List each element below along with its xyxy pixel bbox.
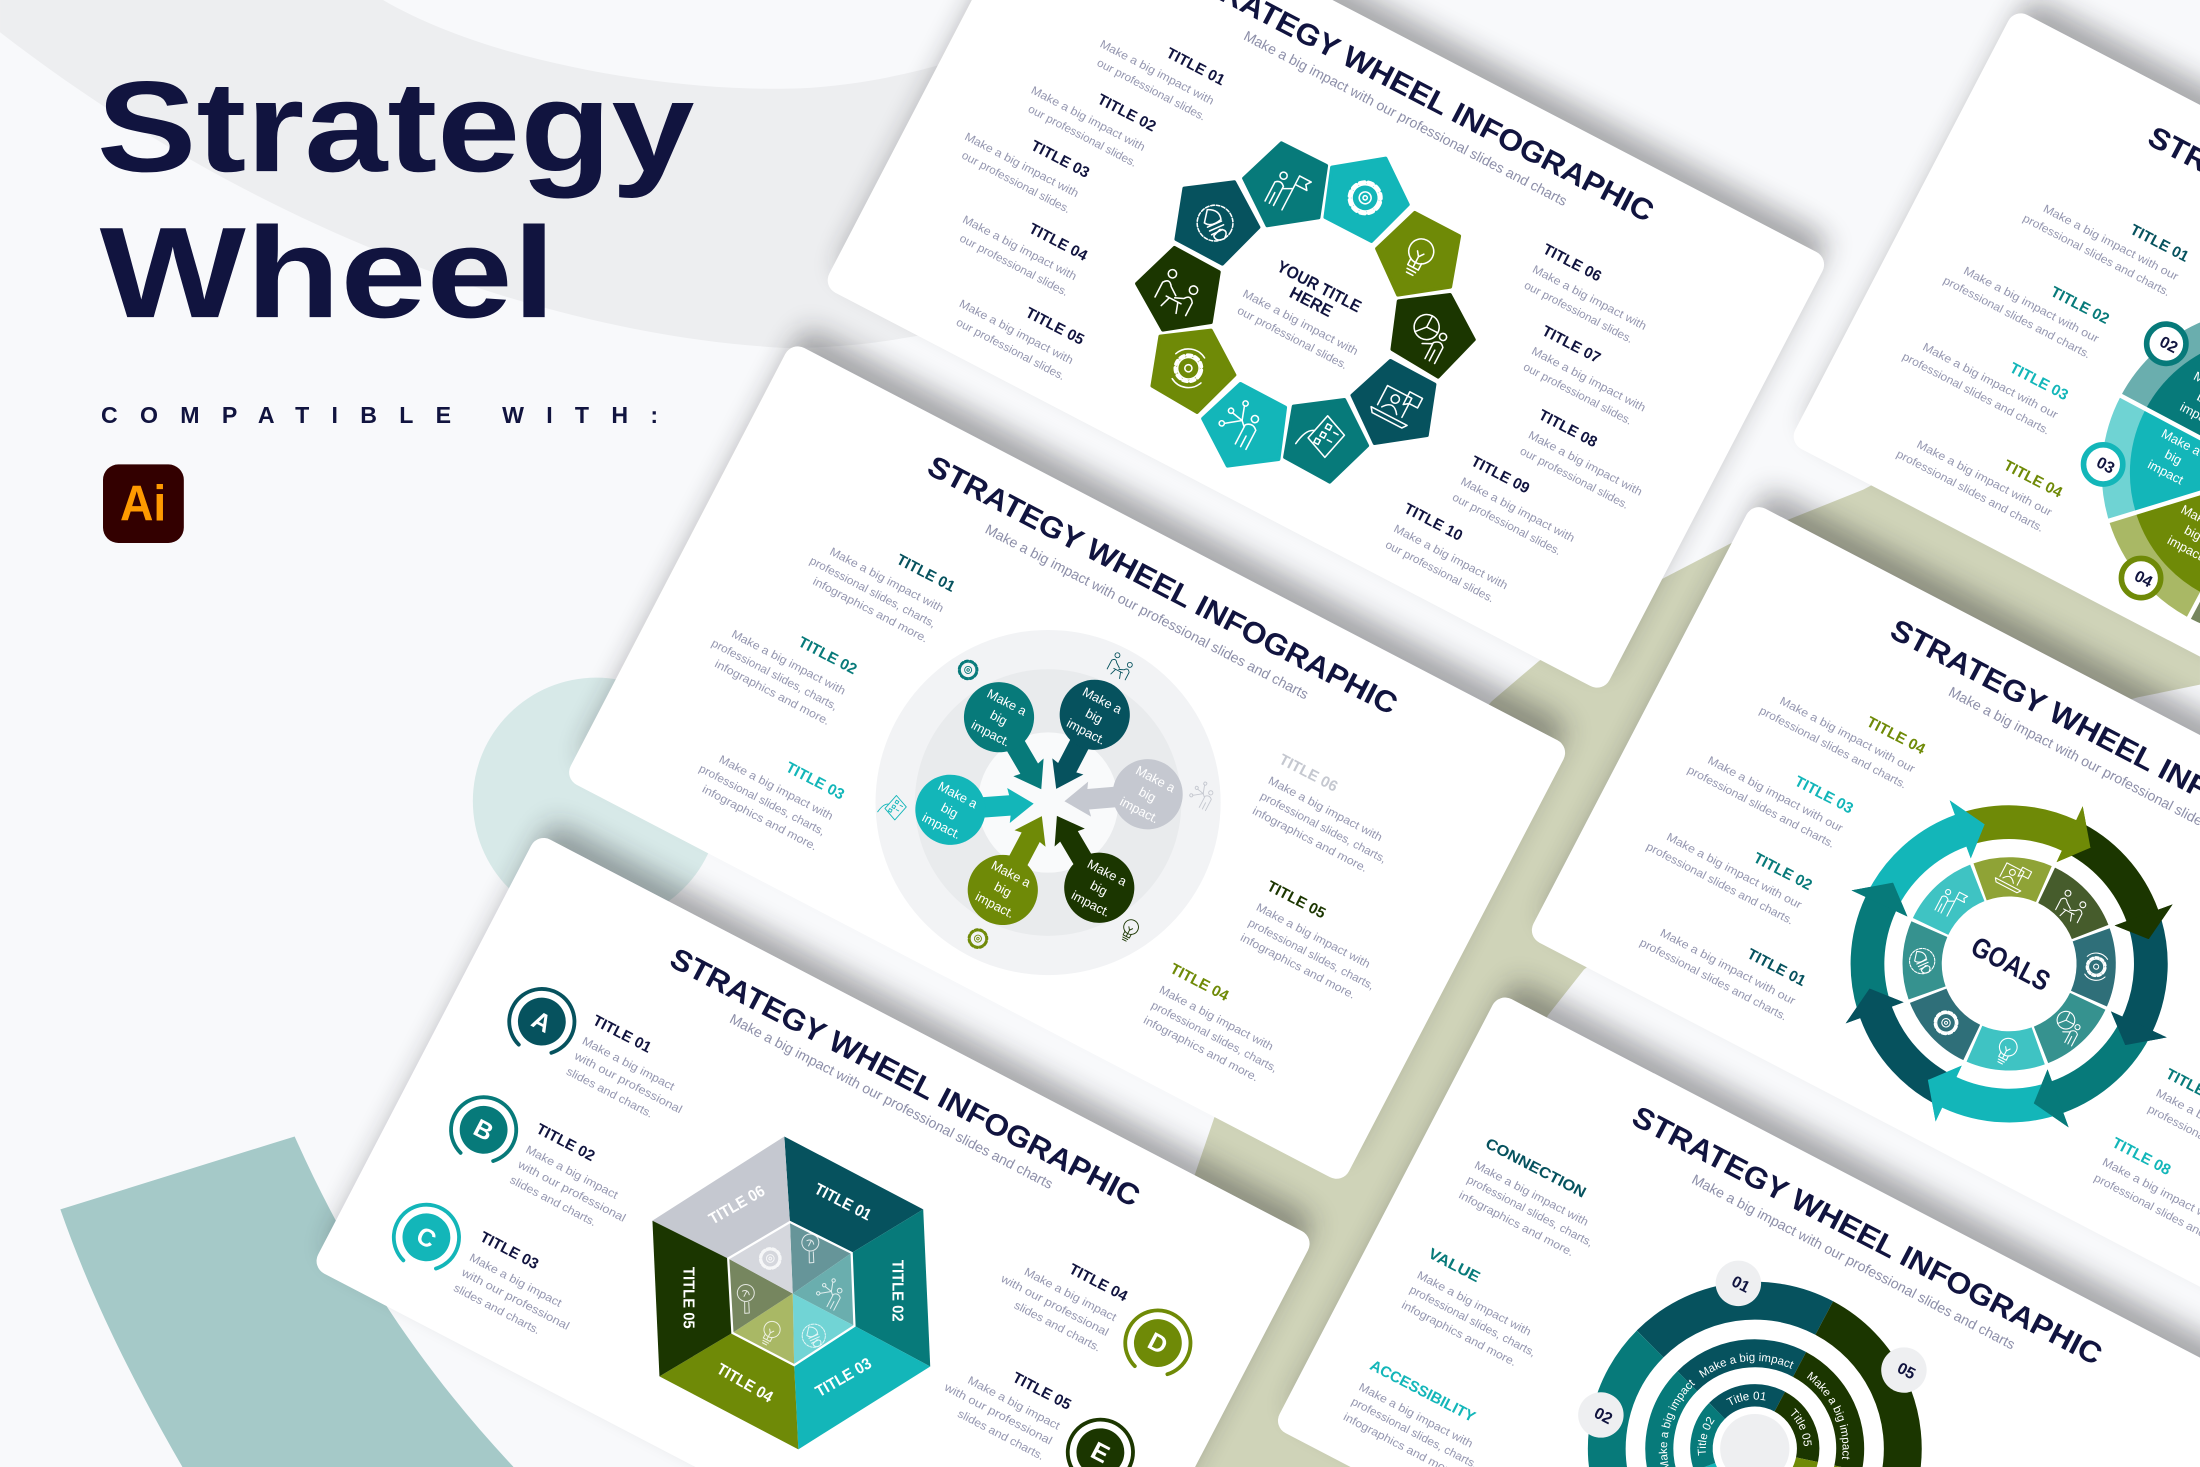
panel: slide with pentagon wheel: TITLE 03 xyxy=(1028,137,1092,182)
chart: six arrow pins: Make a xyxy=(989,857,1034,891)
chart: goals inner segments xyxy=(1901,856,2117,1072)
chart: hexagon wheel: TITLE 02 xyxy=(888,1260,906,1322)
curved labels: Title 02 xyxy=(1697,1416,1715,1456)
panel: slide with concentric rings: CONNECTION xyxy=(1483,1135,1589,1202)
chart: six arrow pins: big xyxy=(988,707,1010,728)
panel: slide with arrow pins: TITLE 05 xyxy=(1264,878,1329,923)
icon: Adobe Illustrator logo xyxy=(103,464,184,543)
panel: slide with pentagon wheel: TITLE 04 xyxy=(1026,220,1091,265)
panel: slide with pentagon wheel: our professional slides. xyxy=(1026,103,1138,170)
panel: slide with concentric rings: Make a big impact with xyxy=(1357,1381,1475,1451)
panel: slide with pentagon wheel: Make a big impact with xyxy=(1529,345,1647,415)
panel: slide with goals arrow ring: TITLE 03 xyxy=(1792,773,1856,817)
panel: slide with arrow pins: TITLE 03 xyxy=(783,759,847,803)
panel: slide with sector wheel: professional slides and charts. xyxy=(1941,275,2092,361)
curved labels xyxy=(1658,1352,1850,1467)
panel: slide with sector wheel: TITLE 04 xyxy=(2001,457,2065,502)
chart: six arrow pins: Make a xyxy=(985,686,1030,719)
panel: slide with goals arrow ring: professional slides and charts. xyxy=(1644,841,1795,927)
panel: slide with pentagon wheel: TITLE 07 xyxy=(1539,323,1603,367)
panel: slide with hexagon: Make a big impact xyxy=(965,1375,1062,1433)
heading: Strategy Wheel: Wheel xyxy=(100,201,556,345)
panel: slide with pentagon wheel: our professional slides. xyxy=(1235,305,1349,372)
icons: pin wheel xyxy=(878,652,1217,951)
panel: slide with arrow pins: infographics and more. xyxy=(1141,1015,1260,1084)
chart: hexagon wheel: TITLE 03 xyxy=(812,1354,875,1401)
curved labels: Make a big impact xyxy=(1806,1372,1850,1460)
curved labels: Title 05 xyxy=(1791,1408,1812,1446)
panel: slide with hexagon: TITLE 05 xyxy=(1009,1369,1074,1414)
panel: slide with hexagon: TITLE 02 xyxy=(533,1121,598,1165)
panel: slide with pentagon wheel: TITLE 10 xyxy=(1401,500,1465,545)
panel: slide with concentric rings: VALUE xyxy=(1425,1245,1483,1286)
chart: hexagon wheel xyxy=(652,1136,930,1449)
panel: slide with arrow pins: professional slides, charts, xyxy=(1246,917,1376,993)
badge: 03: 03 xyxy=(2093,453,2118,478)
heading: Strategy Wheel: Strategy xyxy=(97,55,695,199)
panel: slide with sector wheel: professional slides and charts. xyxy=(1894,448,2045,535)
label: compatible with: COMPATIBLE WITH: xyxy=(101,402,658,428)
panel: slide with arrow pins: Make a big impact with xyxy=(1157,984,1275,1053)
panel: slide with pentagon wheel: Make a big impact with xyxy=(1530,264,1648,333)
badge: A xyxy=(499,978,586,1064)
panel: slide with sector wheel: Make a big impact with our xyxy=(1920,341,2060,422)
panel: slide with goals arrow ring: Make a big impact with our xyxy=(1705,755,1845,835)
panel: slide with pentagon wheel: Make a big impact with xyxy=(1029,85,1147,154)
panel: slide with arrow pins: infographics and more. xyxy=(700,784,819,853)
chart: six arrow pins: impact. xyxy=(1118,794,1161,826)
panel: slide with pentagon wheel: our professional slides. xyxy=(957,233,1070,299)
chart: ring of ten pentagons xyxy=(1137,143,1474,482)
panel: slide with goals arrow ring: Make a big impact with our xyxy=(1664,831,1804,912)
panel: slide with pentagon wheel: Make a big impact with xyxy=(1240,288,1360,358)
panel: slide with hexagon: TITLE 01 xyxy=(590,1012,655,1057)
panel: slide with arrow pins xyxy=(564,341,1570,1184)
chart: six arrow pins: big xyxy=(992,879,1014,900)
chart: six arrow pins: big xyxy=(1083,705,1105,727)
curved labels: Make a big impact xyxy=(1698,1352,1794,1378)
panel: slide with arrow pins: Make a big impact with xyxy=(1254,902,1372,971)
panel: slide with concentric rings: Make a big impact with xyxy=(1472,1160,1590,1229)
chart: six arrow pins: impact. xyxy=(969,717,1013,750)
chart: six arrow pins: impact. xyxy=(1069,887,1113,920)
panel: slide with hexagon: with our professional xyxy=(998,1273,1110,1339)
panel: slide with concentric rings: professional slides, charts, xyxy=(1349,1396,1479,1467)
panel: slide with hexagon: with our professional xyxy=(515,1158,627,1225)
chart: six arrow pins: Make a xyxy=(1133,763,1179,796)
panel: slide with hexagon: Make a big impact xyxy=(580,1035,677,1094)
panel: slide with arrow pins: professional slides, charts, xyxy=(1149,1000,1279,1075)
badge: 05 xyxy=(1881,1347,1927,1393)
panel: slide with concentric rings: Make a big impact with xyxy=(1415,1270,1533,1339)
panel: slide with pentagon wheel: our professional slides. xyxy=(1450,492,1563,558)
heading: Strategy Wheel xyxy=(97,55,695,345)
panel: slide with hexagon: slides and charts. xyxy=(508,1174,598,1229)
panel: slide with goals arrow ring: TITLE 02 xyxy=(1751,850,1815,894)
panel: slide with concentric rings: professional slides, charts, xyxy=(1465,1174,1595,1249)
panel: slide with arrow pins: TITLE 04 xyxy=(1167,960,1232,1005)
panel: slide with pentagon wheel: Make a big impact with xyxy=(1391,523,1509,592)
chart: six arrow pins: big xyxy=(1088,877,1110,899)
panel: slide with sector wheel: professional slides and charts. xyxy=(1900,351,2051,437)
panel: slide with pentagon wheel: our professional slides. xyxy=(1521,361,1634,428)
icons: pentagon wheel xyxy=(1153,167,1454,462)
panel: slide with sector wheel: Make a big impact with our xyxy=(1914,439,2054,519)
panel: slide with arrow pins: professional slides, charts, xyxy=(1258,790,1388,866)
panel: slide with concentric rings: ACCESSIBILITY xyxy=(1367,1357,1478,1426)
panel: slide with arrow pins: infographics and more. xyxy=(713,658,831,728)
chart: hexagon wheel: TITLE 06 xyxy=(706,1182,768,1228)
panel: slide with pentagon wheel: Make a big impact with xyxy=(1458,476,1576,545)
badge: 04: 04 xyxy=(2131,567,2155,591)
panel: slide with pentagon wheel: Make a big impact with xyxy=(960,214,1078,283)
badge: D xyxy=(1115,1299,1202,1386)
chart: six arrow pins xyxy=(913,667,1186,937)
panel: slide with goals arrow ring: professional slides and charts. xyxy=(1638,937,1789,1023)
panel: slide with sector wheel: TITLE 01 xyxy=(2127,221,2192,266)
panel: slide with hexagon: slides and charts. xyxy=(955,1408,1046,1463)
panel: slide with arrow pins: infographics and more. xyxy=(1250,805,1369,875)
panel: slide with pentagon wheel: Make a big impact with xyxy=(962,131,1080,200)
panel: slide with pentagon wheel: TITLE 02 xyxy=(1094,91,1159,135)
panel: slide with goals arrow ring: TITLE 04 xyxy=(1864,714,1928,758)
badge: 03 xyxy=(2084,445,2123,484)
panel: slide with hexagon: slides and charts. xyxy=(1012,1300,1102,1354)
panel: slide with pentagon wheel: TITLE 06 xyxy=(1540,241,1604,285)
panel: slide with hexagon: slides and charts. xyxy=(451,1282,542,1337)
panel: slide with arrow pins: Make a big impact with xyxy=(1266,775,1384,844)
panel: slide with arrow pins: TITLE 01 xyxy=(893,551,958,596)
panel: slide with hexagon: Make a big impact xyxy=(1022,1266,1119,1324)
panel: slide with pentagon wheel: HERE xyxy=(1286,283,1336,321)
chart: six arrow pins: big xyxy=(939,800,961,821)
icon: Adobe Illustrator logo: Ai xyxy=(120,475,166,532)
panel: slide with pentagon wheel: TITLE 01 xyxy=(1163,45,1228,89)
panel: slide with hexagon: with our professional xyxy=(941,1381,1054,1448)
panel: slide with arrow pins: Make a big impact with xyxy=(729,628,847,698)
panel: slide with pentagon wheel: TITLE 05 xyxy=(1023,304,1087,349)
panel: slide with hexagon: TITLE 03 xyxy=(477,1229,541,1273)
panel: slide with pentagon wheel: TITLE 08 xyxy=(1536,407,1600,451)
badge: C xyxy=(383,1193,470,1280)
chart: six arrow pins: impact. xyxy=(920,810,963,842)
panel: slide with sector wheel: Make a big impact with our xyxy=(1961,265,2101,345)
panel: slide with arrow pins: Make a big impact with xyxy=(717,754,835,823)
panel: slide with goals arrow ring: TITLE 08 xyxy=(2109,1134,2173,1179)
badge: 04 xyxy=(2121,558,2161,598)
panel: slide with goals arrow ring: TITLE 01 xyxy=(1744,946,1809,990)
badge: 01 xyxy=(1716,1261,1761,1306)
chart: six arrow pins: Make a xyxy=(1085,856,1130,889)
panel: slide with hexagon: with our professional xyxy=(571,1050,684,1116)
panel: slide with arrow pins: TITLE 02 xyxy=(795,634,860,678)
panel: slide with hexagon xyxy=(312,833,1315,1467)
badge: 02: 02 xyxy=(1591,1404,1615,1428)
badge: C: C xyxy=(412,1221,441,1255)
panel: slide with arrow pins: TITLE 06 xyxy=(1276,751,1340,796)
chart: hexagon wheel: TITLE 05 xyxy=(679,1267,697,1329)
panel: slide with pentagon wheel: our professional slides. xyxy=(954,317,1067,383)
panel: slide with concentric rings: STRATEGY WHEEL INFOGRAPHIC xyxy=(1627,1100,2107,1372)
panel: slide with sector wheel: Make a big impact with our xyxy=(2041,203,2180,283)
chart: six arrow pins: big xyxy=(1136,784,1159,805)
badge: 02 xyxy=(1578,1392,1624,1438)
panel: slide with hexagon: Make a big impact xyxy=(523,1144,620,1202)
chart: concentric background circles xyxy=(876,630,1221,975)
panel: slide with concentric rings xyxy=(1278,998,2200,1467)
badge: D: D xyxy=(1143,1327,1172,1360)
chart: six arrow pins: Make a xyxy=(1080,684,1125,717)
panel: slide with goals arrow ring: professional slides and charts. xyxy=(1685,764,1836,851)
panel: slide with pentagon wheel: YOUR TITLE xyxy=(1274,257,1365,316)
chart: sector wheel xyxy=(2097,304,2200,642)
badge: B: B xyxy=(469,1114,498,1147)
panel: slide with pentagon wheel: Make a big impact with xyxy=(1526,429,1644,499)
chart: sector wheel: impact xyxy=(2145,457,2186,488)
panel: slide with pentagon wheel: our professional slides. xyxy=(1518,445,1630,512)
panel: slide with pentagon wheel: Make a big impact with xyxy=(1098,38,1216,108)
panel: slide with hexagon: TITLE 04 xyxy=(1066,1261,1131,1305)
panel: slide with hexagon: slides and charts. xyxy=(564,1066,655,1121)
panel: slide with concentric rings: professional slides, charts, xyxy=(1407,1284,1537,1359)
badge: B xyxy=(440,1086,528,1172)
panel: slide with sector wheel: TITLE 03 xyxy=(2007,360,2071,404)
panel: slide with hexagon: Make a big impact with our professional slides and charts xyxy=(727,1010,1056,1192)
panel: slide with pentagon wheel: Make a big impact with our professional slides and charts xyxy=(1241,28,1570,209)
panel: slide with concentric rings: Make a big impact with our professional slides and charts xyxy=(1689,1171,2018,1352)
panel: slide with goals arrow ring: professional slides and charts. xyxy=(1757,705,1908,791)
background swoosh: grey xyxy=(0,0,1010,348)
badge: 02 xyxy=(2147,324,2186,363)
chart: hexagon wheel: TITLE 01 xyxy=(811,1180,874,1224)
panel: slide with arrow pins: Make a big impact with our professional slides and charts xyxy=(983,521,1311,702)
panel: slide with arrow pins: professional slides, charts, xyxy=(697,763,827,838)
panel: slide with pentagon wheel: our professional slides. xyxy=(1522,280,1635,346)
panel: slide with pentagon wheel xyxy=(823,0,1829,693)
panel: slide with pentagon wheel: TITLE 09 xyxy=(1468,453,1532,497)
chart: goals arrow ring xyxy=(1794,749,2200,1179)
badge: 02: 02 xyxy=(2156,333,2181,357)
chart: six arrow pins: impact. xyxy=(1064,715,1108,748)
chart: sector wheel: big xyxy=(2162,447,2185,468)
panel: slide with arrow pins: STRATEGY WHEEL INFOGRAPHIC xyxy=(922,450,1403,721)
panel: slide with concentric rings: infographics and more. xyxy=(1457,1189,1575,1259)
panel: slide with hexagon: with our professional xyxy=(458,1266,571,1333)
panel: slide with sector wheel: professional slides and charts. xyxy=(2021,213,2172,299)
badge: A: A xyxy=(527,1006,556,1039)
panel: slide with arrow pins: professional slides, charts, xyxy=(807,555,937,630)
panel: slide with arrow pins: infographics and more. xyxy=(811,576,930,645)
label: GOALS: GOALS xyxy=(1966,931,2055,997)
background band: olive xyxy=(1094,421,2200,1467)
panel: slide with sector wheel: TITLE 02 xyxy=(2048,283,2112,328)
panel: slide with pentagon wheel: our professional slides. xyxy=(1383,539,1496,605)
chart: six arrow pins: impact. xyxy=(973,889,1017,921)
chart: hexagon wheel: TITLE 04 xyxy=(713,1360,776,1406)
panel: slide with pentagon wheel: our professional slides. xyxy=(1095,57,1207,123)
panel: slide with pentagon wheel: our professional slides. xyxy=(959,150,1072,216)
badge: 01: 01 xyxy=(1729,1272,1753,1297)
panel: slide with pentagon wheel: Make a big impact with xyxy=(957,298,1075,367)
panel: slide with arrow pins: infographics and more. xyxy=(1238,932,1357,1002)
badge: E xyxy=(1057,1408,1144,1467)
background circle: pale teal xyxy=(473,678,720,925)
panel: slide with concentric rings: infographics and more. xyxy=(1399,1299,1518,1369)
panel: slide with arrow pins: Make a big impact with xyxy=(827,546,945,615)
panel: slide with goals arrow ring: Make a big impact with our xyxy=(1777,695,1917,776)
chart: concentric ring wheel xyxy=(1588,1282,1922,1467)
background arc: teal xyxy=(60,1136,514,1467)
panel: slide with goals arrow ring: Make a big impact with our xyxy=(1658,927,1797,1008)
panel: slide with hexagon: STRATEGY WHEEL INFOGRAPHIC xyxy=(665,942,1145,1214)
panel: slide with arrow pins: professional slides, charts, xyxy=(709,638,839,713)
badge: 05: 05 xyxy=(1894,1359,1918,1383)
chart: six arrow pins: Make a xyxy=(936,778,981,812)
curved labels: Title 01 xyxy=(1726,1392,1766,1405)
panel: slide with hexagon: Make a big impact xyxy=(467,1252,564,1310)
panel: slide with sector wheel xyxy=(1789,8,2200,844)
panel: slide with goals arrow ring xyxy=(1527,502,2200,1340)
